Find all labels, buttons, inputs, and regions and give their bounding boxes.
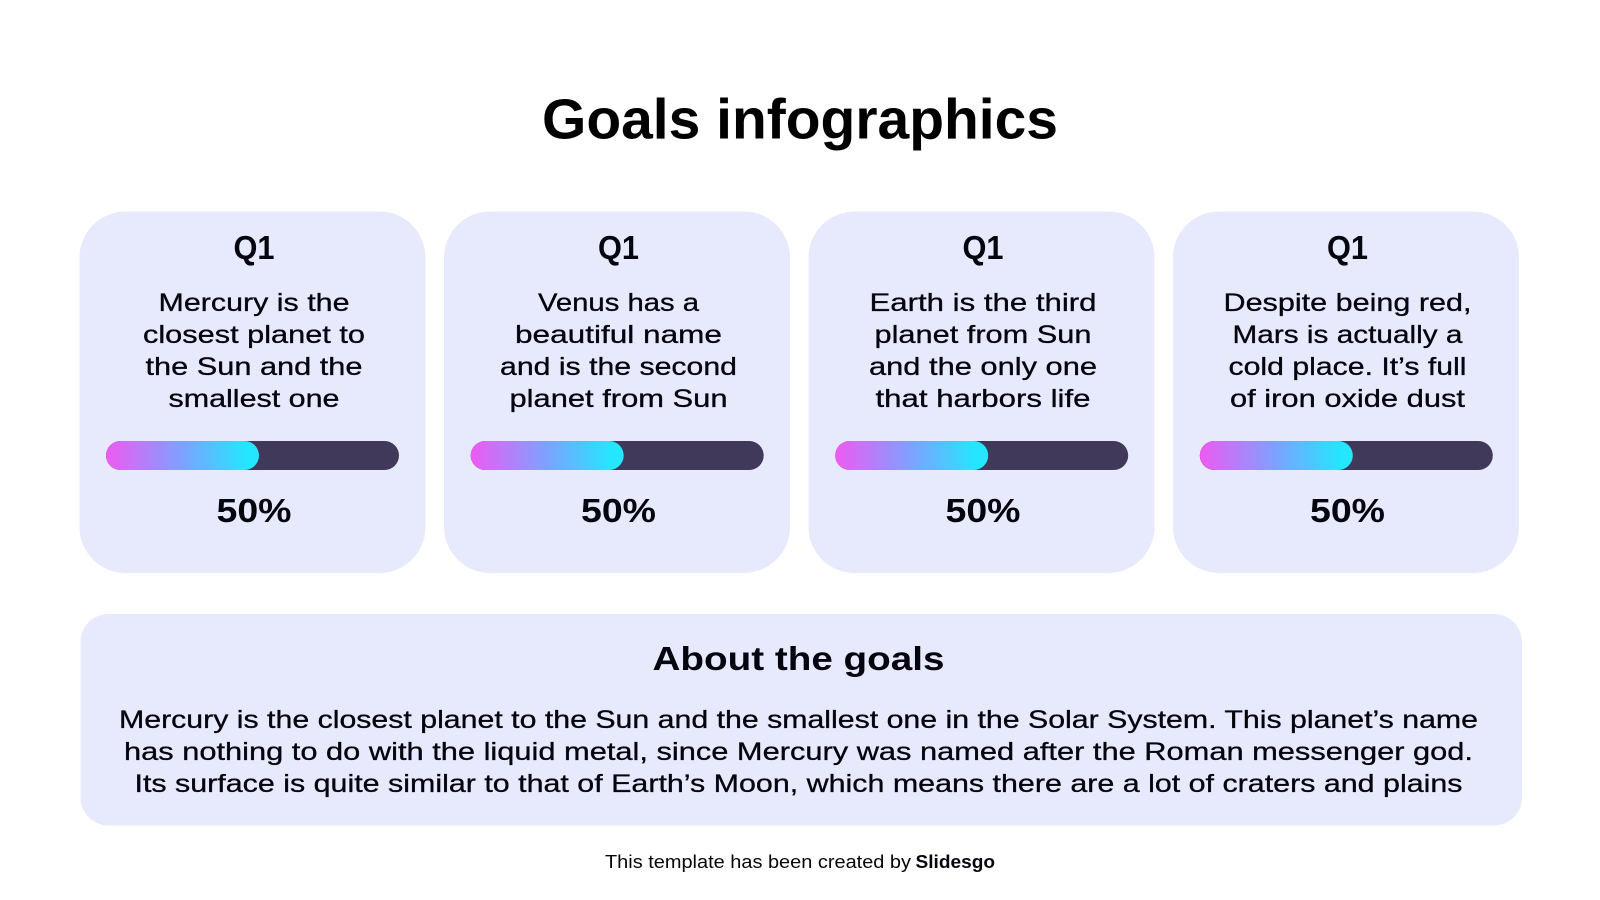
text: Earth description: that harbors life (876, 385, 1090, 413)
heading: Q1: Q1 (1327, 229, 1368, 266)
text: about description: Mercury is the closest planet to the Sun and the smallest one in the Solar System. This planet’s name (119, 706, 1478, 734)
text: Mars description: of iron oxide dust (1230, 385, 1465, 413)
heading: Q1: Q1 (598, 229, 639, 266)
text: Earth description: and the only one (869, 353, 1097, 381)
panel: Q1 Venus (444, 212, 790, 573)
footer credit: This template has been created by (605, 852, 911, 872)
text: Mars description (1224, 289, 1472, 413)
text: Venus description: beautiful name (515, 321, 722, 349)
title: Goals infographics (542, 88, 1058, 152)
text: Earth description: planet from Sun (874, 321, 1092, 349)
panel: Q1 Earth (808, 212, 1154, 573)
progress bar: 50% (835, 441, 1128, 470)
value: 50%: 50% (946, 492, 1020, 529)
heading: Q1: Q1 (234, 229, 274, 266)
text: Mercury description: smallest one (168, 385, 340, 413)
heading: About the goals: About the goals (652, 640, 944, 677)
text: Venus description: Venus has a (538, 289, 699, 317)
text: Mars description: Mars is actually a (1232, 321, 1463, 349)
text: Mercury description (143, 289, 365, 413)
panel: about the goals (80, 614, 1522, 826)
text: about description: has nothing to do with the liquid metal, since Mercury was named after the Roman messenger god. (124, 738, 1473, 766)
value: 50%: 50% (581, 492, 656, 529)
text: Mercury description: closest planet to (143, 321, 365, 349)
text: about description: Its surface is quite similar to that of Earth’s Moon, which means there are a lot of craters and plains (134, 770, 1462, 798)
text: about description (119, 706, 1478, 798)
progress bar: 50% (106, 441, 399, 470)
text: Earth description: Earth is the third (870, 289, 1096, 317)
panel: Q1 Mars (1173, 212, 1519, 573)
value: 50%: 50% (216, 492, 292, 529)
text: Venus description: and is the second (500, 353, 737, 381)
text: Mercury description: the Sun and the (146, 353, 362, 381)
text: Mars description: Despite being red, (1224, 289, 1472, 317)
progress bar: 50% (1200, 441, 1493, 470)
heading: Q1: Q1 (962, 229, 1004, 266)
text: Venus description (500, 289, 737, 413)
text: Mercury description: Mercury is the (158, 289, 350, 317)
text: Venus description: planet from Sun (510, 385, 728, 413)
value: 50%: 50% (1310, 492, 1385, 529)
text: Earth description (869, 289, 1097, 413)
panel: Q1 Mercury (80, 212, 426, 573)
footer credit: Slidesgo (916, 852, 995, 872)
progress bar: 50% (471, 441, 764, 470)
text: Mars description: cold place. It’s full (1228, 353, 1466, 381)
